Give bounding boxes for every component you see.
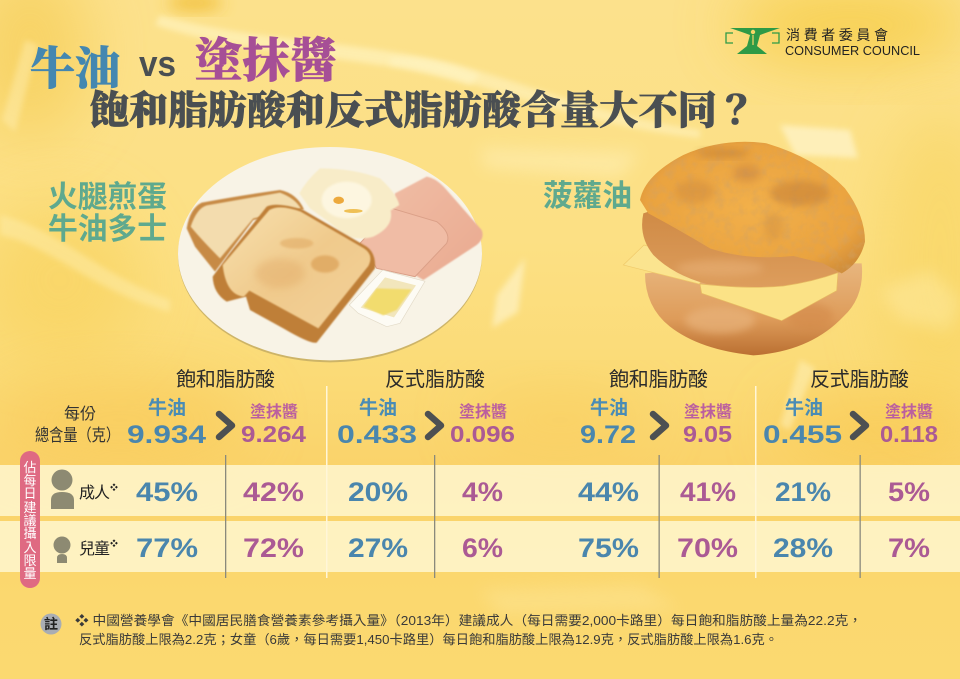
side label pill: 每 xyxy=(23,473,37,488)
butter labels xyxy=(148,397,823,419)
column headings: 反式脂肪酸 xyxy=(810,368,909,391)
table: column dividers xyxy=(225,386,861,578)
adult percentages: 4% xyxy=(462,477,503,507)
photo: pineapple bun with butter xyxy=(623,142,865,355)
adult percentages: 42% xyxy=(243,477,304,507)
note badge: 註 xyxy=(44,616,58,632)
logo text: English: CONSUMER COUNCIL xyxy=(785,43,920,58)
side label pill: 日 xyxy=(23,486,37,501)
butter labels: 牛油 xyxy=(785,397,823,419)
column headings: 反式脂肪酸 xyxy=(385,368,485,391)
margarine labels xyxy=(250,402,933,421)
side label pill: 入 xyxy=(23,540,37,555)
margarine labels: 塗抹醬 xyxy=(684,402,732,421)
child percentages: 27% xyxy=(348,533,408,563)
adult percentages: 5% xyxy=(888,477,930,507)
icon: adult xyxy=(51,470,74,509)
adult percentages: 21% xyxy=(775,477,831,507)
child percentages: 75% xyxy=(578,533,639,563)
row label: content per serving: 每份 xyxy=(64,405,96,423)
butter labels: 牛油 xyxy=(359,397,397,419)
margarine grams xyxy=(241,421,938,447)
band: child xyxy=(0,521,960,572)
bottom bun xyxy=(645,263,862,355)
title xyxy=(30,36,756,133)
logo: Consumer Council xyxy=(726,27,920,58)
side label pill: 限 xyxy=(23,553,37,568)
margarine labels: 塗抹醬 xyxy=(885,402,933,421)
title: butter: 牛油 xyxy=(30,44,120,94)
row label: content per serving xyxy=(35,405,120,445)
butter grams: 0.455 xyxy=(763,421,842,449)
food label: ham egg butter toast: 火腿煎蛋 xyxy=(48,181,167,214)
food label: pineapple bun: 菠蘿油 xyxy=(543,180,632,213)
icon: child xyxy=(54,536,70,563)
butter: left edge xyxy=(623,245,710,284)
adult percentages: 41% xyxy=(680,477,736,507)
butter grams xyxy=(127,421,842,449)
child percentages: 70% xyxy=(677,533,738,563)
food label: ham egg butter toast xyxy=(48,181,167,246)
child percentages: 77% xyxy=(136,533,198,563)
food label: ham egg butter toast: 牛油多士 xyxy=(48,213,167,246)
note badge xyxy=(40,614,62,634)
side label pill: 建 xyxy=(23,500,37,515)
butter labels: 牛油 xyxy=(148,397,186,419)
logo text: Chinese: 消費者委員會 xyxy=(786,27,888,43)
butter grams: 9.72 xyxy=(580,421,636,449)
side label pill: 量 xyxy=(23,566,37,581)
front toast xyxy=(213,205,375,343)
table: row bands xyxy=(0,465,960,572)
child percentages: 6% xyxy=(462,533,503,563)
middle bun xyxy=(642,210,850,287)
row label: content per serving: 總含量（克） xyxy=(35,426,120,445)
margarine labels: 塗抹醬 xyxy=(459,402,507,421)
arrows: greater than xyxy=(219,414,866,437)
child label: ❖ xyxy=(110,539,118,548)
column headings: 飽和脂肪酸 xyxy=(176,368,275,391)
title: vs: vs xyxy=(139,43,176,84)
margarine grams: 0.118 xyxy=(880,421,938,447)
note text line 2: 反式脂肪酸上限為2.2克；女童（6歲，每日需要1,450卡路里）每日飽和脂肪酸上限為12.9克，反式脂肪酸上限為1.6克。 xyxy=(79,632,778,647)
adult percentages: 45% xyxy=(136,477,198,507)
footnote xyxy=(40,613,862,647)
child percentages xyxy=(136,533,930,563)
adult label: ❖ xyxy=(110,483,118,492)
side label pill: 攝 xyxy=(23,526,37,541)
margarine grams: 0.096 xyxy=(450,421,515,447)
fried egg xyxy=(299,168,399,239)
photo: breakfast plate xyxy=(178,147,483,362)
child percentages: 7% xyxy=(888,533,930,563)
column headings: 飽和脂肪酸 xyxy=(609,368,708,391)
side label pill: 議 xyxy=(23,513,37,528)
child label: 兒童 xyxy=(79,539,110,558)
adult percentages xyxy=(136,477,930,507)
title: subtitle: 飽和脂肪酸和反式脂肪酸含量大不同？ xyxy=(90,89,756,133)
butter tub xyxy=(349,270,425,327)
side label pill: 佔 xyxy=(23,460,37,475)
child percentages: 72% xyxy=(243,533,304,563)
side label pill xyxy=(20,451,40,588)
title: margarine: 塗抹醬 xyxy=(195,36,337,88)
margarine grams: 9.264 xyxy=(241,421,306,447)
adult label: 成人 xyxy=(79,484,110,502)
butter: front edge xyxy=(700,273,838,321)
column headings xyxy=(176,368,909,391)
butter grams: 0.433 xyxy=(337,421,417,449)
band: adult xyxy=(0,465,960,516)
adult percentages: 20% xyxy=(348,477,408,507)
crust top xyxy=(640,142,865,273)
margarine grams: 9.05 xyxy=(683,421,732,447)
note text line 1: ❖ 中國營養學會《中國居民膳食營養素參考攝入量》（2013年）建議成人（每日需要2,000卡路里）每日飽和脂肪酸上量為22.2克， xyxy=(75,613,862,628)
adult percentages: 44% xyxy=(578,477,639,507)
butter grams: 9.934 xyxy=(127,421,206,449)
child percentages: 28% xyxy=(773,533,833,563)
butter labels: 牛油 xyxy=(590,397,628,419)
back toast xyxy=(187,190,304,272)
plate xyxy=(178,148,482,362)
icon: scales xyxy=(726,28,780,54)
margarine labels: 塗抹醬 xyxy=(250,402,298,421)
ham slices xyxy=(383,177,483,280)
